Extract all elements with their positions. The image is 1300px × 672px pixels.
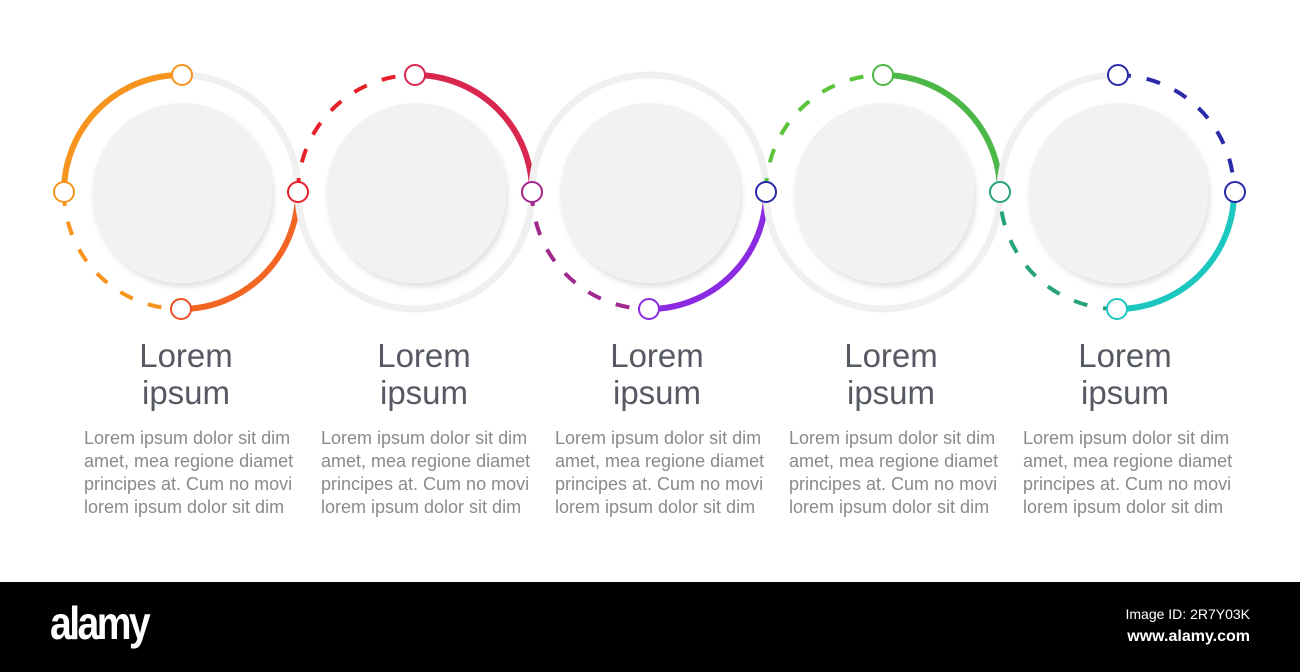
circle 1 xyxy=(64,75,298,309)
text 4: Lorem ipsum dolor sit dim amet, mea regione diamet principes at. Cum no movi lorem ipsum dolor sit dim xyxy=(789,428,998,517)
title 3: ipsum xyxy=(613,374,701,411)
text 5: Lorem ipsum dolor sit dim amet, mea regione diamet principes at. Cum no movi lorem ipsum dolor sit dim xyxy=(1023,428,1232,517)
title 5 xyxy=(1078,337,1172,411)
title 1: Lorem xyxy=(139,337,233,374)
circle 5 xyxy=(1000,75,1234,309)
title 2: Lorem xyxy=(377,337,471,374)
title 4: ipsum xyxy=(847,374,935,411)
title 3 xyxy=(610,337,704,411)
circle 2 xyxy=(298,75,532,309)
text 3: Lorem ipsum dolor sit dim amet, mea regione diamet principes at. Cum no movi lorem ipsum dolor sit dim xyxy=(555,428,764,517)
title 1: ipsum xyxy=(142,374,230,411)
text 2: Lorem ipsum dolor sit dim amet, mea regione diamet principes at. Cum no movi lorem ipsum dolor sit dim xyxy=(321,428,530,517)
title 2: ipsum xyxy=(380,374,468,411)
title 5: Lorem xyxy=(1078,337,1172,374)
circle 4 xyxy=(766,75,1000,309)
title 3: Lorem xyxy=(610,337,704,374)
nodes xyxy=(54,65,1245,319)
title 4: Lorem xyxy=(844,337,938,374)
title 1 xyxy=(139,337,233,411)
url: www.alamy.com xyxy=(1127,628,1250,645)
image id: Image ID: 2R7Y03K xyxy=(1125,606,1250,622)
title 5: ipsum xyxy=(1081,374,1169,411)
footer bar xyxy=(0,582,1300,672)
diagram: five circles with arcs xyxy=(53,64,1246,320)
circle 3 xyxy=(532,75,766,309)
title 2 xyxy=(377,337,471,411)
title 4 xyxy=(844,337,938,411)
text 1: Lorem ipsum dolor sit dim amet, mea regione diamet principes at. Cum no movi lorem ipsum dolor sit dim xyxy=(84,428,293,517)
logo: alamy xyxy=(50,597,148,649)
